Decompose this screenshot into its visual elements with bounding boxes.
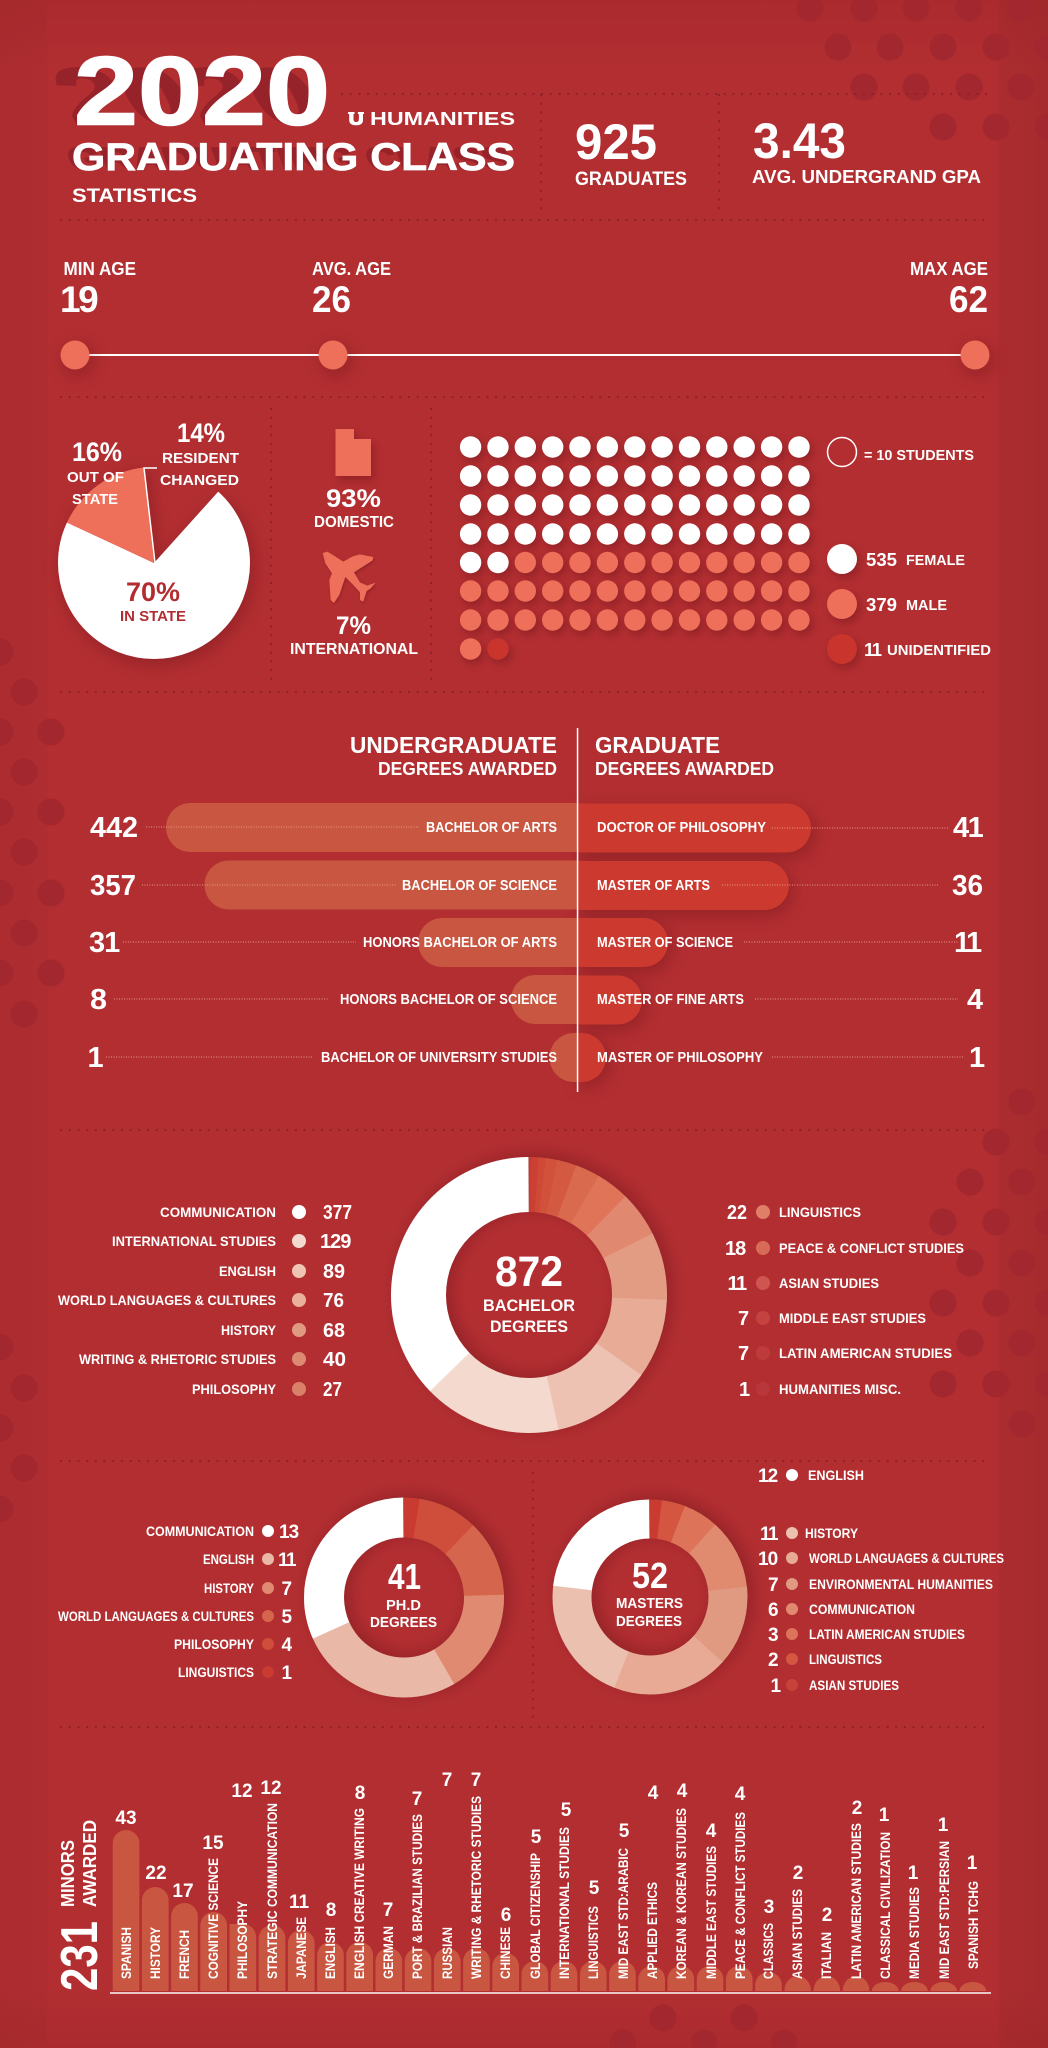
graduate labels: MASTER OF PHILOSOPHY (597, 1050, 763, 1066)
bar labels: INTERNATIONAL STUDIES (556, 1827, 572, 1979)
legend: bachelor majors left: PHILOSOPHY (192, 1381, 277, 1397)
legend: bachelor majors right: HUMANITIES MISC. (779, 1381, 901, 1397)
bar labels: ITALIAN (818, 1932, 834, 1979)
baseline (110, 1992, 991, 1994)
legend: bachelor majors right: 22 (727, 1202, 747, 1224)
domestic and international (290, 429, 418, 658)
legend: masters fields: 2 (768, 1650, 779, 1671)
legend: bachelor majors left: COMMUNICATION (160, 1204, 276, 1220)
bar values: 5 (531, 1827, 542, 1848)
center divider line (577, 728, 578, 1092)
legend: PhD fields: LINGUISTICS (178, 1665, 254, 1680)
diverging bar chart: degrees awarded (88, 728, 985, 1092)
donut center label: 52 masters degrees: 52 (632, 1555, 668, 1596)
legend: bachelor majors left: WORLD LANGUAGES & CULTURES (58, 1292, 276, 1308)
bar chart: minors (113, 1830, 986, 1991)
legend: bachelor majors right (725, 1202, 964, 1401)
bar labels: MEDIA STUDIES (906, 1887, 922, 1979)
stat: international: INTERNATIONAL (290, 641, 418, 658)
pie chart: residency (67, 418, 239, 625)
leader lines (106, 827, 963, 1057)
stat: graduates: GRADUATES (575, 169, 687, 190)
heading: undergraduate (350, 732, 557, 779)
heading: undergraduate: DEGREES AWARDED (378, 759, 557, 779)
legend: ten students: = 10 STUDENTS (864, 447, 974, 464)
timeline line and markers (60, 340, 990, 370)
legend: female (827, 544, 965, 574)
heading: 231 minors awarded: AWARDED (80, 1820, 100, 1907)
legend: unidentified: UNIDENTIFIED (887, 643, 991, 659)
bar values: 4 (677, 1781, 688, 1802)
donut center label: 872 bachelor degrees: DEGREES (490, 1318, 568, 1336)
bar labels: ASIAN STUDIES (789, 1889, 805, 1979)
legend: PhD fields: 7 (282, 1579, 292, 1600)
legend: bachelor majors right: 1 (739, 1379, 750, 1401)
bar values: 5 (561, 1800, 572, 1821)
icon: Utah (336, 429, 371, 476)
legend: masters fields: 3 (768, 1625, 779, 1646)
bar values: 1 (938, 1815, 949, 1836)
max age (910, 259, 988, 320)
stat: international (290, 612, 418, 658)
bar values: 4 (648, 1783, 659, 1804)
min age (60, 259, 136, 320)
label: resident changed: CHANGED (160, 472, 239, 489)
icon: university U logo (348, 112, 364, 125)
bar labels: KOREAN & KOREAN STUDIES (673, 1808, 689, 1979)
average age: 26 (312, 279, 351, 320)
legend: bachelor majors right: 7 (738, 1308, 749, 1330)
bar labels: CHINESE (497, 1927, 513, 1979)
donut center label: 872 bachelor degrees: BACHELOR (483, 1297, 575, 1315)
undergraduate counts: 357 (90, 870, 136, 902)
heading: graduate: GRADUATE (595, 732, 720, 758)
bar labels: MID EAST STD:ARABIC (615, 1848, 631, 1979)
label: in state (120, 577, 186, 625)
label: resident changed: 14% (177, 418, 225, 448)
legend: male (827, 589, 947, 619)
label: in state: 70% (126, 577, 180, 607)
graduate labels: MASTER OF FINE ARTS (597, 992, 744, 1008)
graduate labels: DOCTOR OF PHILOSOPHY (597, 820, 766, 836)
dot matrix: students by gender (460, 436, 810, 660)
donut center label: 872 bachelor degrees: 872 (495, 1248, 563, 1296)
bar labels: SPANISH TCHG (965, 1881, 981, 1969)
legend: masters fields: LATIN AMERICAN STUDIES (809, 1627, 965, 1642)
bar values: 7 (471, 1770, 481, 1791)
legend: PhD fields: 4 (282, 1635, 292, 1656)
bar labels: GLOBAL CITIZENSHIP (527, 1853, 543, 1979)
legend: bachelor majors right: 18 (725, 1238, 746, 1260)
legend: masters fields: ENVIRONMENTAL HUMANITIES (809, 1577, 993, 1592)
label: resident changed: RESIDENT (162, 450, 239, 467)
bar values: 7 (442, 1770, 452, 1791)
bar labels: HISTORY (147, 1926, 163, 1979)
average age: AVG. AGE (312, 259, 391, 279)
bar labels: LINGUISTICS (585, 1906, 601, 1979)
legend: bachelor majors left: 27 (323, 1379, 342, 1401)
label: out of state: STATE (72, 491, 118, 508)
legend: ten students (828, 438, 974, 466)
legend: masters fields: ASIAN STUDIES (809, 1678, 899, 1693)
legend: bachelor majors left: 377 (323, 1202, 352, 1224)
undergraduate labels (321, 820, 557, 1066)
graduate labels: MASTER OF SCIENCE (597, 935, 733, 951)
stat: domestic: DOMESTIC (314, 514, 394, 531)
legend: masters fields: 7 (768, 1575, 779, 1596)
bar values: 2 (793, 1863, 803, 1884)
graduate labels (597, 820, 766, 1066)
legend: PhD fields: 13 (279, 1522, 299, 1543)
undergraduate labels: HONORS BACHELOR OF SCIENCE (340, 992, 557, 1008)
legend: bachelor majors left: 89 (323, 1261, 345, 1283)
donut center label: 41 PhD degrees: DEGREES (370, 1614, 437, 1631)
legend: bachelor majors left: INTERNATIONAL STUDIES (112, 1233, 276, 1249)
bar values: 1 (967, 1853, 978, 1874)
label: out of state: 16% (72, 437, 122, 467)
label: out of state: OUT OF (67, 469, 124, 486)
stat: domestic (314, 485, 394, 531)
legend: bachelor majors right: LINGUISTICS (779, 1204, 861, 1220)
heading: graduating class: GRADUATING CLASS (72, 136, 515, 179)
undergraduate labels: HONORS BACHELOR OF ARTS (363, 935, 557, 951)
legend: bachelor majors left: 76 (323, 1290, 344, 1312)
bar values: 3 (764, 1897, 774, 1918)
bar labels: CLASSICS (760, 1923, 776, 1979)
bar labels: SPANISH (118, 1927, 134, 1979)
bar labels: ENGLISH CREATIVE WRITING (351, 1808, 367, 1979)
heading: 231 minors awarded: 231 (51, 1921, 109, 1991)
legend: PhD fields (58, 1522, 299, 1684)
bar labels: FRENCH (176, 1930, 192, 1979)
donut chart: masters (572, 1519, 728, 1675)
bar values: 11 (289, 1892, 309, 1913)
legend: bachelor majors right: LATIN AMERICAN STUDIES (779, 1345, 952, 1361)
graduate labels: MASTER OF ARTS (597, 878, 710, 894)
bar labels (118, 1796, 981, 1979)
min age: MIN AGE (64, 259, 136, 279)
label: in state: IN STATE (120, 608, 186, 625)
title: 2020: 2020 (74, 36, 330, 146)
bar values: 2 (852, 1798, 862, 1819)
donut chart: PhD (324, 1518, 484, 1678)
graduate counts: 1 (969, 1042, 985, 1074)
undergraduate counts: 31 (89, 927, 120, 959)
legend: unidentified (827, 634, 991, 664)
heading: Humanities: HUMANITIES (370, 109, 515, 129)
donut center label: 52 masters degrees: MASTERS (616, 1595, 683, 1612)
bar labels: RUSSIAN (439, 1927, 455, 1979)
legend: bachelor majors right: PEACE & CONFLICT STUDIES (779, 1240, 964, 1256)
bar labels: STRATEGIC COMMUNICATION (264, 1803, 280, 1979)
legend: PhD fields: 11 (278, 1550, 297, 1571)
undergraduate counts (88, 812, 138, 1074)
legend: PhD fields: COMMUNICATION (146, 1524, 254, 1539)
undergraduate labels: BACHELOR OF ARTS (426, 820, 557, 836)
legend: female: 535 (866, 549, 897, 570)
pie slices (106, 468, 202, 611)
panel: minors awarded (51, 1770, 991, 1994)
legend: bachelor majors left: 40 (323, 1349, 346, 1371)
bar values: 12 (260, 1778, 282, 1799)
heading: graduate (595, 732, 774, 779)
donut chart: bachelor (418, 1184, 640, 1406)
legend: masters fields: 6 (768, 1600, 779, 1621)
heading: undergraduate: UNDERGRADUATE (350, 732, 557, 758)
donut center label: 41 PhD degrees: 41 (388, 1556, 421, 1597)
bar labels: ENGLISH (322, 1927, 338, 1979)
bar labels: PORT & BRAZILIAN STUDIES (409, 1814, 425, 1979)
heading: graduate: DEGREES AWARDED (595, 759, 774, 779)
legend: bachelor majors left: 129 (320, 1231, 351, 1253)
bar values: 8 (355, 1783, 365, 1804)
stat: GPA: 3.43 (753, 113, 846, 169)
legend: PhD fields: HISTORY (204, 1581, 254, 1596)
age timeline (60, 259, 990, 370)
bar labels: WRITING & RHETORIC STUDIES (468, 1796, 484, 1979)
label: resident changed (160, 418, 239, 489)
graduate counts: 41 (953, 812, 984, 844)
legend: masters fields: 10 (758, 1549, 778, 1570)
bar values: 22 (145, 1863, 167, 1884)
bar values (115, 1770, 978, 1926)
legend: masters fields: 1 (770, 1676, 782, 1697)
bar labels: GERMAN (380, 1926, 396, 1979)
undergraduate counts: 1 (88, 1042, 104, 1074)
graduate counts: 4 (967, 984, 983, 1016)
bar values: 2 (822, 1905, 832, 1926)
bar values: 7 (412, 1789, 422, 1810)
bar values: 43 (115, 1808, 137, 1829)
bar labels: LATIN AMERICAN STUDIES (848, 1823, 864, 1979)
legend: masters fields: ENGLISH (808, 1468, 864, 1483)
bar values: 4 (706, 1821, 717, 1842)
graduate bars (577, 804, 811, 1082)
bar values: 1 (908, 1863, 919, 1884)
heading: 231 minors awarded (51, 1820, 109, 1991)
bar values: 12 (231, 1781, 253, 1802)
panel: PhD degrees (58, 1518, 484, 1684)
stat: graduates (575, 114, 687, 190)
average age (312, 259, 391, 320)
legend: bachelor majors left: ENGLISH (219, 1263, 276, 1279)
max age: 62 (949, 279, 988, 320)
bar labels: APPLIED ETHICS (644, 1882, 660, 1979)
legend: bachelor majors left: HISTORY (221, 1322, 277, 1338)
stat: GPA (752, 113, 981, 187)
legend: PhD fields: WORLD LANGUAGES & CULTURES (58, 1609, 254, 1624)
donut center label: 52 masters degrees (616, 1555, 683, 1630)
donut center label: 872 bachelor degrees (483, 1248, 575, 1336)
donut center label: 52 masters degrees: DEGREES (616, 1613, 682, 1630)
legend: masters fields: COMMUNICATION (809, 1602, 915, 1617)
legend: PhD fields: 1 (282, 1663, 292, 1684)
legend: PhD fields: PHILOSOPHY (174, 1637, 254, 1652)
bar values: 1 (879, 1805, 890, 1826)
bar values: 15 (202, 1833, 224, 1854)
legend: dot matrix (827, 438, 991, 664)
undergraduate counts: 8 (90, 984, 107, 1016)
heading: statistics: STATISTICS (72, 185, 197, 207)
bar labels: JAPANESE (293, 1917, 309, 1979)
heading: 231 minors awarded: MINORS (58, 1840, 78, 1907)
legend: unidentified: 11 (864, 639, 882, 660)
legend: bachelor majors right: ASIAN STUDIES (779, 1275, 879, 1291)
stat: graduates: 925 (575, 114, 657, 170)
legend: masters fields: HISTORY (805, 1526, 858, 1541)
stat: domestic: 93% (326, 485, 381, 513)
undergraduate labels: BACHELOR OF SCIENCE (402, 878, 557, 894)
max age: MAX AGE (910, 259, 988, 279)
bar labels: PEACE & CONFLICT STUDIES (732, 1812, 748, 1979)
bar values: 17 (172, 1881, 194, 1902)
title shadow (37, 52, 518, 177)
header: title block (37, 36, 518, 207)
undergraduate bars (166, 803, 577, 1082)
bar labels: PHILOSOPHY (234, 1900, 250, 1979)
panel: bachelor degrees (58, 1184, 964, 1406)
donut center label: 41 PhD degrees (370, 1556, 437, 1631)
bar values: 7 (383, 1900, 393, 1921)
legend: masters fields (758, 1466, 1004, 1697)
min age: 19 (60, 279, 98, 320)
legend: masters fields: 11 (760, 1524, 779, 1545)
undergraduate labels: BACHELOR OF UNIVERSITY STUDIES (321, 1050, 557, 1066)
graduate counts (952, 812, 985, 1074)
legend: PhD fields: ENGLISH (203, 1552, 254, 1567)
label: out of state (67, 437, 124, 508)
donut center label: 41 PhD degrees: PH.D (386, 1597, 421, 1614)
title shadow: 2020 (37, 52, 339, 141)
graduate counts: 11 (954, 927, 982, 959)
stat: international: 7% (336, 612, 371, 640)
legend: bachelor majors left: WRITING & RHETORIC STUDIES (79, 1351, 276, 1367)
legend: female: FEMALE (906, 553, 965, 569)
bar values: 6 (501, 1905, 511, 1926)
legend: bachelor majors left (58, 1202, 352, 1401)
legend: bachelor majors right: 11 (728, 1273, 747, 1295)
legend: bachelor majors right: MIDDLE EAST STUDIES (779, 1310, 926, 1326)
legend: masters fields: WORLD LANGUAGES & CULTURES (809, 1551, 1004, 1566)
stat: GPA: AVG. UNDERGRAND GPA (752, 166, 981, 187)
title shadow: GRADUATING CLASS (61, 141, 518, 177)
legend: bachelor majors right: 7 (738, 1343, 749, 1365)
bar values: 5 (589, 1878, 600, 1899)
bar labels: COGNITIVE SCIENCE (205, 1858, 221, 1979)
legend: masters fields: LINGUISTICS (809, 1652, 882, 1667)
bar labels: MID EAST STD:PERSIAN (936, 1841, 952, 1979)
undergraduate counts: 442 (90, 812, 138, 844)
graduate counts: 36 (952, 870, 983, 902)
legend: male: 379 (866, 594, 897, 615)
legend: male: MALE (906, 598, 947, 614)
bar values: 8 (326, 1900, 336, 1921)
bar labels: CLASSICAL CIVILIZATION (877, 1832, 893, 1979)
bar labels: MIDDLE EAST STUDIES (703, 1846, 719, 1979)
legend: PhD fields: 5 (282, 1607, 292, 1628)
bar values: 4 (735, 1784, 746, 1805)
legend: masters fields: 12 (758, 1466, 778, 1487)
icon: plane (323, 552, 376, 603)
legend: bachelor majors left: 68 (323, 1320, 345, 1342)
bar values: 5 (619, 1821, 630, 1842)
panel: masters degrees (572, 1466, 1004, 1697)
